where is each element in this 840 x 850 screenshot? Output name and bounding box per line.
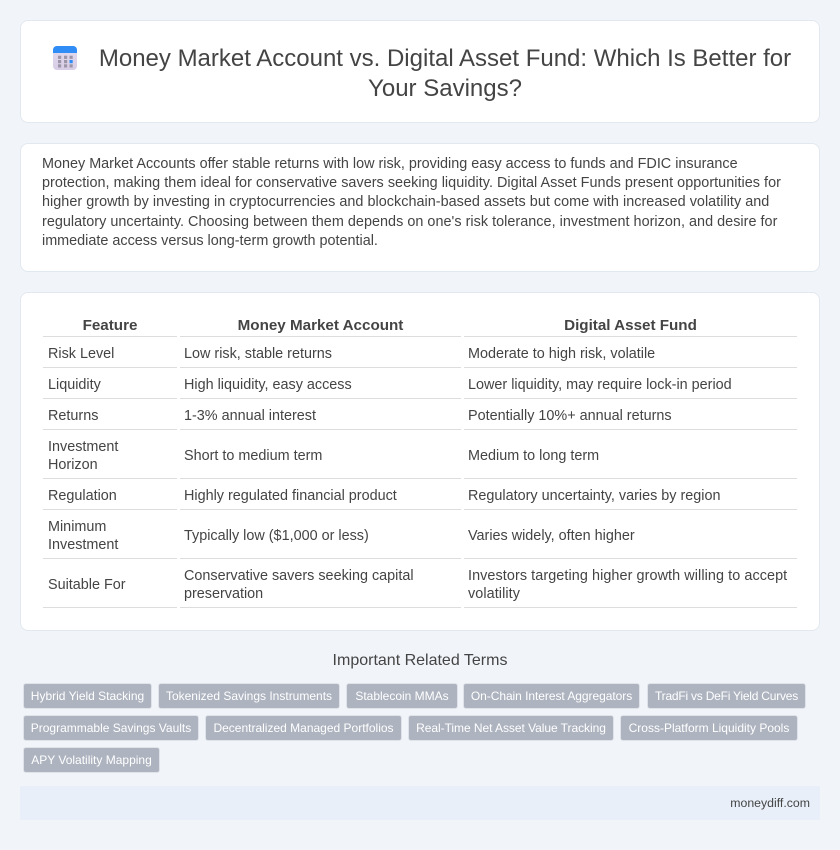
related term tags bbox=[23, 683, 806, 773]
row: liquidity: Lower liquidity, may require lock-in period bbox=[468, 377, 732, 393]
row: liquidity: Liquidity bbox=[48, 377, 101, 393]
summary text bbox=[42, 156, 781, 249]
heading: related terms: Important Related Terms bbox=[333, 652, 507, 669]
summary text: immediate access versus long-term growth potential. bbox=[42, 233, 378, 249]
row: regulation: Highly regulated financial product bbox=[184, 488, 397, 504]
row: risk level: Moderate to high risk, volatile bbox=[468, 346, 655, 362]
row: risk level bbox=[48, 346, 655, 362]
table header: Money Market Account bbox=[238, 317, 403, 334]
related term tags: Decentralized Managed Portfolios bbox=[213, 721, 394, 735]
comparison table bbox=[43, 317, 797, 608]
row: investment horizon: Short to medium term bbox=[184, 448, 322, 464]
related term tags: Hybrid Yield Stacking bbox=[31, 689, 144, 703]
row: minimum investment: Minimum bbox=[48, 519, 106, 535]
row: risk level: Risk Level bbox=[48, 346, 114, 362]
row: returns bbox=[48, 408, 672, 424]
row: regulation: Regulation bbox=[48, 488, 117, 504]
row: minimum investment: Investment bbox=[48, 537, 118, 553]
row: suitable for: volatility bbox=[468, 586, 520, 602]
row: suitable for: Suitable For bbox=[48, 577, 126, 593]
row: suitable for bbox=[48, 568, 788, 602]
row: risk level: Low risk, stable returns bbox=[184, 346, 332, 362]
row: regulation bbox=[48, 488, 720, 504]
table header: Feature bbox=[83, 317, 137, 334]
panel: header bbox=[20, 20, 820, 123]
row: liquidity bbox=[48, 377, 732, 393]
related term tags: Tokenized Savings Instruments bbox=[166, 689, 332, 703]
related term tags: APY Volatility Mapping bbox=[31, 753, 152, 767]
footer bbox=[20, 786, 820, 820]
row: liquidity: High liquidity, easy access bbox=[184, 377, 352, 393]
row: investment horizon: Medium to long term bbox=[468, 448, 599, 464]
related term tags: TradFi vs DeFi Yield Curves bbox=[655, 689, 798, 703]
row: minimum investment: Typically low ($1,000 or less) bbox=[184, 528, 369, 544]
row: suitable for: preservation bbox=[184, 586, 263, 602]
panel: summary bbox=[20, 143, 820, 272]
row: returns: Returns bbox=[48, 408, 98, 424]
related term tags: On-Chain Interest Aggregators bbox=[471, 689, 632, 703]
related term tags: Real-Time Net Asset Value Tracking bbox=[416, 721, 606, 735]
summary text: protection, making them ideal for conservative savers seeking liquidity. Digital Asset Funds present opportunities for bbox=[42, 175, 781, 191]
row: returns: 1-3% annual interest bbox=[184, 408, 316, 424]
row: investment horizon: Horizon bbox=[48, 457, 98, 473]
row: investment horizon: Investment bbox=[48, 439, 118, 455]
row: minimum investment bbox=[48, 519, 635, 553]
related term tags: Stablecoin MMAs bbox=[355, 689, 449, 703]
table header: Digital Asset Fund bbox=[564, 317, 697, 334]
row: investment horizon bbox=[48, 439, 599, 473]
row: returns: Potentially 10%+ annual returns bbox=[468, 408, 672, 424]
title: Money Market Account vs. Digital Asset Fund: Which Is Better for Your Savings? bbox=[99, 45, 791, 102]
table header bbox=[83, 317, 697, 334]
row: minimum investment: Varies widely, often higher bbox=[468, 528, 635, 544]
icon: calendar bbox=[53, 46, 77, 70]
summary text: Money Market Accounts offer stable returns with low risk, providing easy access to funds and FDIC insurance bbox=[42, 156, 738, 172]
related term tags: Programmable Savings Vaults bbox=[31, 721, 191, 735]
row: suitable for: Investors targeting higher growth willing to accept bbox=[468, 568, 787, 584]
summary text: higher growth by investing in cryptocurrencies and blockchain-based assets but come with increased volatility and bbox=[42, 194, 769, 210]
summary text: regulatory uncertainty. Choosing between them depends on one's risk tolerance, investment horizon, and desire for bbox=[42, 214, 777, 230]
related term tags: Cross-Platform Liquidity Pools bbox=[629, 721, 789, 735]
panel: comparison table bbox=[20, 292, 820, 631]
row: regulation: Regulatory uncertainty, varies by region bbox=[468, 488, 720, 504]
footer source: moneydiff.com bbox=[730, 796, 810, 810]
row: suitable for: Conservative savers seeking capital bbox=[184, 568, 414, 584]
